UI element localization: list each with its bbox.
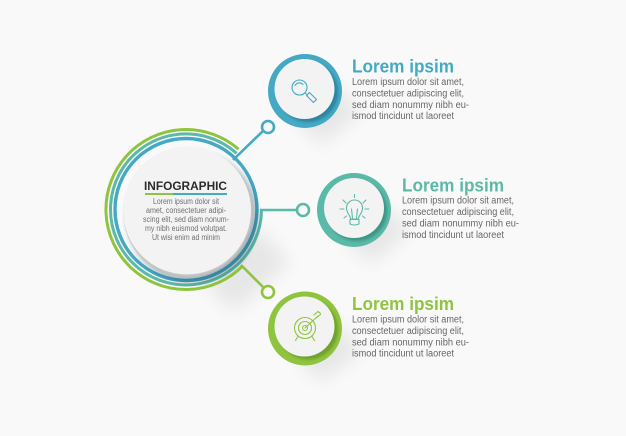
- body: sed diam nonummy nibh eu-: [352, 338, 469, 348]
- item 3: target: [268, 292, 469, 382]
- body: consectetuer adipiscing elit,: [352, 88, 464, 100]
- outer circle: [268, 292, 342, 366]
- heading: INFOGRAPHIC: [144, 179, 227, 193]
- icon: target: [294, 312, 320, 340]
- center text: [143, 197, 229, 242]
- ring: green: [106, 130, 243, 290]
- item 2: idea: [317, 173, 519, 264]
- underline: [145, 193, 227, 195]
- disc rim: [123, 148, 252, 276]
- body: sed diam nonummy nibh eu-: [352, 100, 469, 111]
- title: Lorem ipsim: [352, 294, 454, 314]
- icon: magnifier: [292, 80, 316, 102]
- body: Lorem ipsum dolor sit amet,: [352, 314, 464, 326]
- white disc: [123, 146, 251, 274]
- shadow: [295, 322, 362, 382]
- body: [352, 314, 469, 360]
- shadow: [295, 85, 362, 145]
- connector: blue: [233, 121, 274, 160]
- body: Lorem ipsum dolor sit amet,: [402, 196, 514, 206]
- soft drop shadow: [205, 225, 290, 312]
- outer circle: [268, 54, 342, 128]
- shadow: [344, 204, 411, 264]
- body: consectetuer adipiscing elit,: [352, 326, 464, 337]
- crescent shadow: [284, 302, 339, 360]
- center text: my nibh euismod volutpat.: [145, 224, 227, 233]
- center text: Lorem ipsum dolor sit: [153, 197, 220, 206]
- body: [402, 196, 519, 241]
- title: Lorem ipsim: [402, 176, 504, 196]
- center text: scing elit, sed diam nonum-: [143, 215, 229, 224]
- center text: amet, consectetuer adipi-: [146, 206, 226, 215]
- center text: Ut wisi enim ad minim: [152, 233, 220, 242]
- crescent shadow: [284, 65, 339, 123]
- connector: teal: [260, 204, 309, 216]
- ring: teal: [111, 134, 262, 285]
- title: Lorem ipsim: [352, 56, 454, 76]
- body: Lorem ipsum dolor sit amet,: [352, 77, 464, 88]
- body: [352, 77, 469, 122]
- connector: green: [241, 265, 274, 298]
- ring: blue: [115, 138, 257, 280]
- central circle: [106, 121, 309, 312]
- white disc: [274, 59, 334, 119]
- body: sed diam nonummy nibh eu-: [402, 218, 519, 230]
- body: ismod tincidunt ut laoreet: [352, 111, 454, 122]
- item 1: search: [268, 54, 469, 145]
- outer circle: [317, 173, 391, 247]
- crescent shadow: [327, 181, 387, 241]
- body: consectetuer adipiscing elit,: [402, 207, 514, 218]
- ring shadow overlay: [126, 151, 258, 283]
- white disc: [324, 178, 384, 238]
- icon: light bulb: [340, 194, 369, 225]
- white disc: [274, 296, 334, 356]
- body: ismod tincidunt ut laoreet: [352, 348, 454, 360]
- body: ismod tincidunt ut laoreet: [402, 230, 504, 241]
